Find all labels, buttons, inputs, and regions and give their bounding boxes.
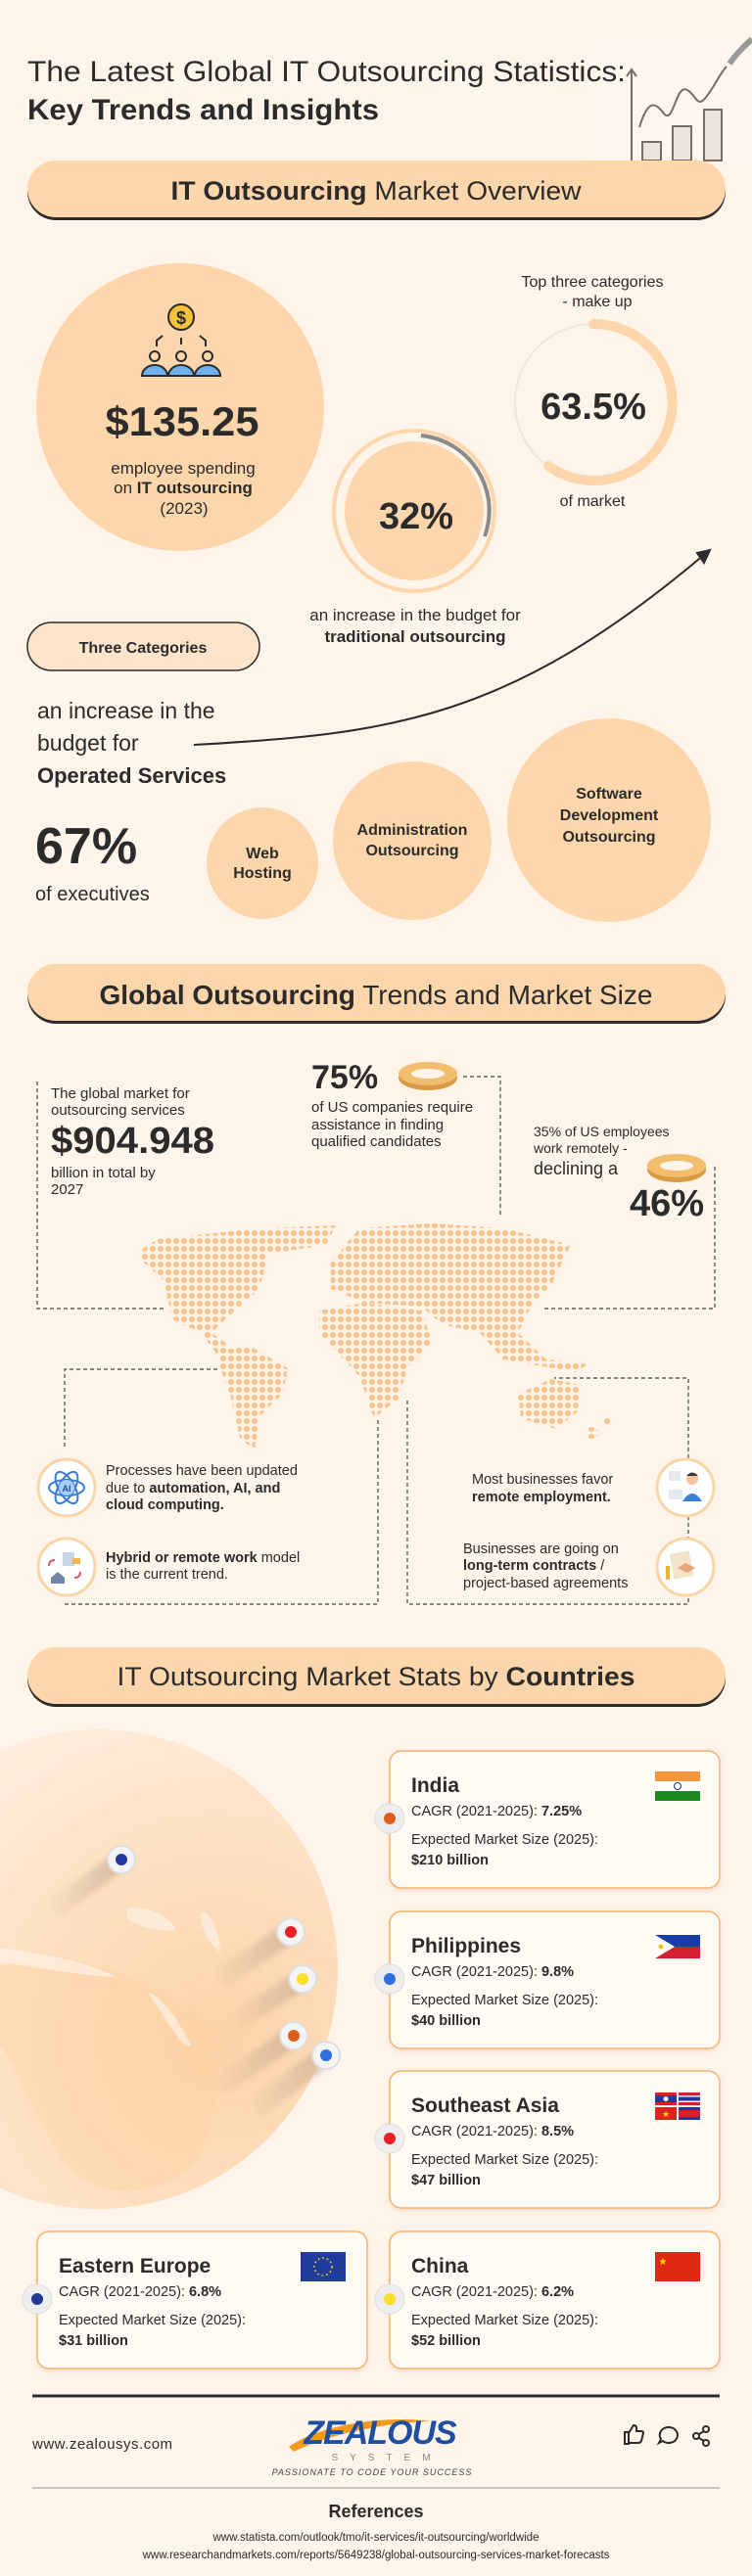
card: Eastern Europe: Expected Market Size (2025):: [59, 2313, 246, 2328]
title: [27, 56, 626, 126]
logo: Zealous System: SYSTEM: [331, 2453, 443, 2463]
circle: $135.25 spending: $135.25: [106, 398, 258, 444]
footer: website: www.zealousys.com: [31, 2436, 173, 2453]
item: long-term contracts: project-based agreements: [463, 1576, 628, 1591]
card: Eastern Europe: [23, 2231, 367, 2369]
card: Philippines: $40 billion: [411, 2013, 481, 2029]
card: India: India: [411, 1774, 459, 1797]
stat: 46% remote decline: 46%: [630, 1183, 704, 1224]
header pill: Stats by Countries: IT Outsourcing Market Stats by Countries: [118, 1662, 634, 1691]
flag: China: ★: [659, 2257, 668, 2268]
text: traditional outsourcing: [309, 606, 521, 646]
card: China: China: [411, 2255, 469, 2277]
stat: $904.948 global market: The global market for: [51, 1085, 190, 1102]
circle: $135.25 spending: (2023): [160, 499, 209, 518]
header pill: IT Outsourcing Market Overview: IT Outsourcing Market Overview: [170, 176, 582, 206]
card: Southeast Asia: CAGR (2021-2025): 8.5%: [411, 2124, 574, 2139]
label pill: Three Categories: [27, 622, 259, 670]
label pill: Three Categories: Three Categories: [79, 640, 207, 657]
flags: Southeast Asia: ★: [662, 2109, 670, 2119]
item: automation AI cloud: Processes have been updated: [106, 1463, 298, 1479]
item: long-term contracts: long-term contracts /: [463, 1558, 605, 1574]
icon: AI atom: [38, 1459, 95, 1516]
card: China: Expected Market Size (2025):: [411, 2313, 598, 2328]
circle: Administration Outsourcing: [333, 761, 492, 920]
circle: $135.25 spending: on IT outsourcing: [114, 479, 253, 497]
arrow: growth curve: [194, 550, 710, 745]
dashed connectors: [37, 1077, 715, 1604]
stat: $904.948 global market: $904.948: [51, 1121, 214, 1162]
flag: EU: [301, 2252, 346, 2281]
card: Southeast Asia: Expected Market Size (2025):: [411, 2152, 598, 2168]
item: hybrid work: Hybrid or remote work model: [106, 1550, 300, 1566]
card: India: Expected Market Size (2025):: [411, 1832, 598, 1848]
item: hybrid work: is the current trend.: [106, 1567, 228, 1583]
card: Eastern Europe: Eastern Europe: [59, 2255, 211, 2277]
card: Philippines: [375, 1911, 720, 2048]
stat: 67% of executives: of executives: [35, 884, 150, 905]
text: operated services: budget for: [37, 730, 139, 756]
logo: Zealous System: ZEALOUS: [303, 2415, 457, 2452]
dotted world map: [137, 1223, 611, 1450]
references: www.researchandmarkets.com/reports/5649238/global-outsourcing-services-market-forecasts: [142, 2550, 610, 2561]
text: operated services: an increase in the: [37, 698, 215, 723]
title: The Latest Global IT Outsourcing Statistics:: [27, 56, 626, 88]
header pill: Global Outsourcing Trends: [27, 964, 726, 1024]
ring: 63.5%: [515, 274, 673, 510]
card: Philippines: Expected Market Size (2025):: [411, 1993, 598, 2008]
icon: ring: [647, 1154, 706, 1182]
circle: 32%: 32%: [379, 496, 453, 537]
item: automation AI cloud: due to automation, AI, and: [106, 1481, 280, 1496]
item: long-term contracts: [463, 1539, 714, 1595]
circle: Software Development Outsourcing: Development: [560, 807, 659, 824]
stat: $904.948 global market: 2027: [51, 1181, 83, 1198]
text: operated services: Operated Services: [37, 763, 226, 788]
card: Southeast Asia: $47 billion: [411, 2173, 481, 2188]
pin trails: [44, 1852, 333, 2119]
stat: $904.948 global market: billion in total by: [51, 1165, 156, 1181]
text: traditional outsourcing: traditional outsourcing: [324, 627, 506, 646]
card: China: CAGR (2021-2025): 6.2%: [411, 2284, 574, 2300]
ring: 63.5%: 63.5%: [540, 387, 646, 428]
flag: India: [655, 1771, 700, 1801]
stat: 75% US companies: of US companies require: [311, 1099, 473, 1116]
icon: AI atom: AI: [63, 1484, 70, 1494]
circle: Web Hosting: [207, 807, 318, 919]
illustration: growth chart: [588, 39, 752, 161]
ring: 63.5%: - make up: [562, 294, 633, 310]
card: China: [375, 2231, 720, 2369]
item: automation AI cloud: [38, 1459, 298, 1516]
stat: 46% remote decline: work remotely -: [533, 1140, 628, 1156]
circle: Web Hosting: Web: [246, 846, 279, 862]
icon: money and people: $: [176, 308, 186, 328]
card: India: $210 billion: [411, 1853, 489, 1868]
stat: 46% remote decline: 35% of US employees: [534, 1124, 670, 1139]
item: hybrid work: [38, 1539, 300, 1595]
ring: 63.5%: of market: [560, 493, 626, 510]
circle: $135.25 spending: [36, 263, 324, 551]
card: India: CAGR (2021-2025): 7.25%: [411, 1804, 582, 1819]
header pill: IT Outsourcing Market Overview: [27, 161, 726, 220]
card: Philippines: CAGR (2021-2025): 9.8%: [411, 1964, 574, 1980]
icon: hybrid: [38, 1539, 95, 1595]
card: Philippines: Philippines: [411, 1935, 521, 1957]
card: India: [375, 1751, 720, 1888]
ring: 63.5%: Top three categories: [522, 274, 663, 291]
stat: 75% US companies: qualified candidates: [311, 1133, 442, 1150]
item: long-term contracts: Businesses are going on: [463, 1541, 619, 1557]
stat: 75% US companies: assistance in finding: [311, 1117, 444, 1133]
circle: $135.25 spending: employee spending: [111, 459, 256, 478]
card: Southeast Asia: Southeast Asia: [411, 2094, 559, 2117]
stat: 75% US companies: [311, 1059, 473, 1150]
stat: 46% remote decline: declining a: [534, 1159, 619, 1178]
item: remote employment: Most businesses favor: [472, 1472, 613, 1488]
text: operated services: [37, 698, 226, 788]
card: China: $52 billion: [411, 2333, 481, 2349]
icon: handshake contract: [657, 1539, 714, 1595]
globe with pins: [0, 1729, 340, 2209]
title: Key Trends and Insights: [27, 94, 379, 126]
circle: 32%: [334, 431, 494, 591]
icon: money and people: [142, 304, 220, 376]
stat: 67% of executives: [35, 818, 150, 905]
item: remote employment: [472, 1459, 714, 1516]
stat: $904.948 global market: outsourcing services: [51, 1102, 185, 1119]
circle: Software Development Outsourcing: [507, 718, 711, 922]
circle: Web Hosting: Hosting: [233, 865, 292, 882]
stat: 46% remote decline: [533, 1124, 706, 1224]
card: Eastern Europe: CAGR (2021-2025): 6.8%: [59, 2284, 221, 2300]
stat: 75% US companies: 75%: [311, 1059, 378, 1096]
item: automation AI cloud: cloud computing.: [106, 1497, 224, 1513]
icon: ring: [399, 1062, 457, 1090]
stat: 67% of executives: 67%: [35, 818, 137, 875]
stat: $904.948 global market: [51, 1085, 214, 1198]
references: References: [328, 2502, 424, 2521]
logo: Zealous System: PASSIONATE TO CODE YOUR SUCCESS: [272, 2467, 472, 2477]
flag: China: [655, 2252, 700, 2281]
card: Southeast Asia: [375, 2071, 720, 2208]
text: traditional outsourcing: an increase in the budget for: [309, 606, 521, 624]
circle: Software Development Outsourcing: Outsourcing: [562, 829, 656, 846]
flag: Philippines: [655, 1935, 700, 1958]
circle: Administration Outsourcing: Outsourcing: [365, 843, 459, 859]
references: [142, 2502, 610, 2561]
flags: Southeast Asia: [655, 2093, 700, 2120]
logo: Zealous System: [272, 2415, 472, 2477]
item: remote employment: remote employment.: [472, 1490, 611, 1505]
icons: like comment share: [625, 2425, 709, 2446]
header pill: Stats by Countries: [27, 1647, 726, 1707]
circle: Administration Outsourcing: Administration: [357, 822, 467, 839]
card: Eastern Europe: $31 billion: [59, 2333, 128, 2349]
references: www.statista.com/outlook/tmo/it-services/it-outsourcing/worldwide: [212, 2532, 539, 2544]
icon: remote worker: [657, 1459, 714, 1516]
circle: Software Development Outsourcing: Software: [576, 786, 642, 803]
header pill: Global Outsourcing Trends: Global Outsourcing Trends and Market Size: [100, 980, 652, 1010]
